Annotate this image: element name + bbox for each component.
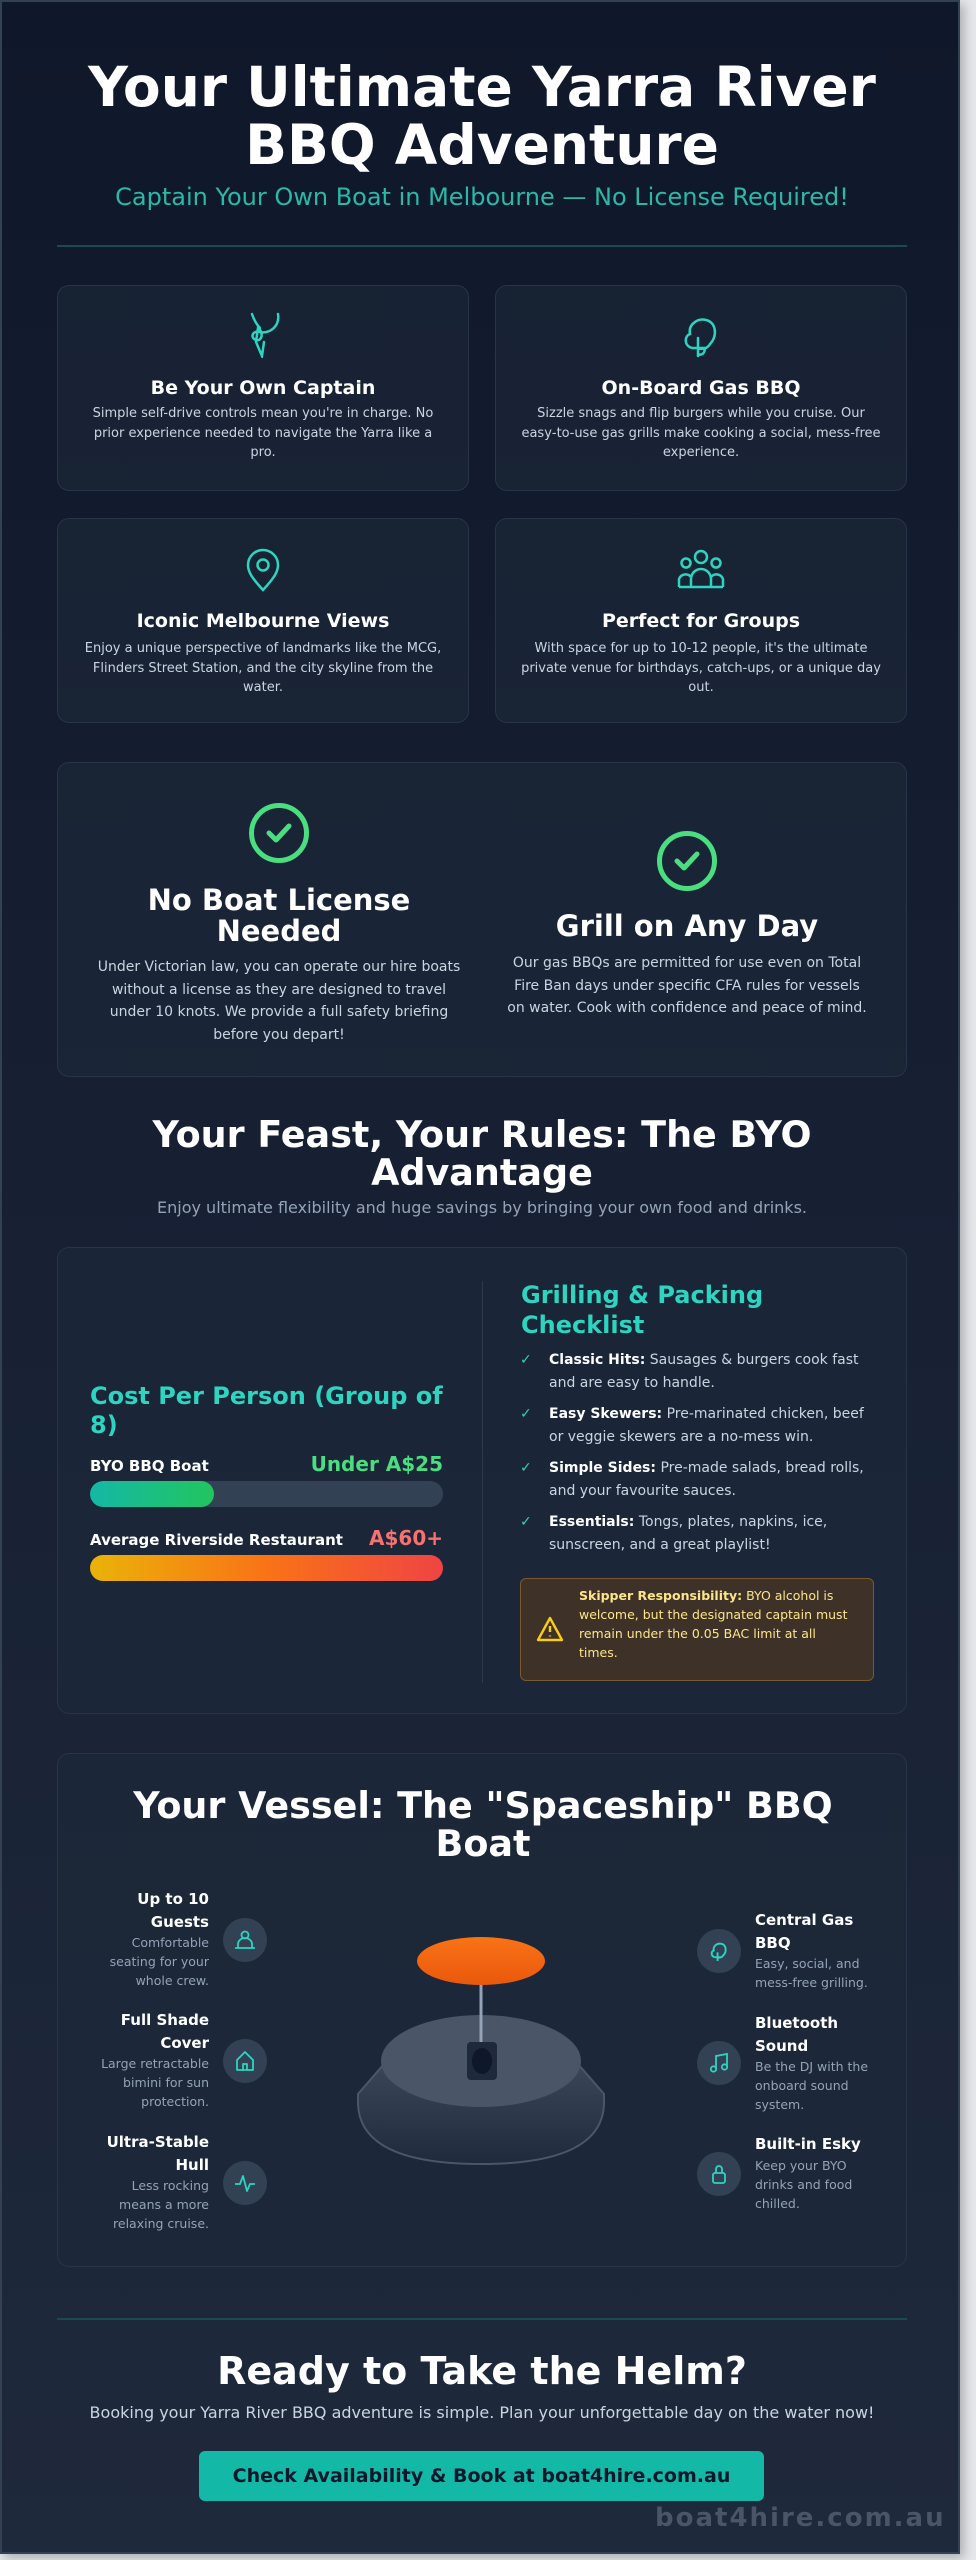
checklist heading: Grilling & Packing Checklist <box>521 1281 763 1339</box>
checklist items: ✓ <box>520 1406 532 1422</box>
panel: BYO <box>57 1247 907 1714</box>
icon: home <box>223 2039 267 2083</box>
card: Perfect for Groups <box>495 518 907 723</box>
text: no license <box>98 959 460 1042</box>
chart: cost per person: BYO BBQ Boat <box>90 1457 209 1475</box>
feature: esky <box>697 2135 861 2210</box>
feature: shade: Large retractable bimini for sun protection. <box>101 2056 209 2109</box>
checklist items <box>520 1352 864 1552</box>
card: Be Your Own Captain <box>57 285 469 491</box>
icon: bbq <box>684 318 716 358</box>
card: Iconic Melbourne Views: Iconic Melbourne Views <box>137 610 389 632</box>
checklist items: Easy Skewers: Pre-marinated chicken, beef or veggie skewers are a no-mess win. <box>549 1406 864 1444</box>
feature: shade: Full Shade Cover <box>121 2011 209 2052</box>
icon: group <box>678 550 724 588</box>
feature: sound: Be the DJ with the onboard sound system. <box>755 2059 868 2112</box>
text: grill any day <box>507 955 867 1016</box>
card: Perfect for Groups: Perfect for Groups <box>602 610 800 632</box>
feature: guests <box>110 1890 267 1988</box>
icon: person <box>223 1918 267 1962</box>
subtitle: Captain Your Own Boat in Melbourne — No License Required! <box>115 183 849 211</box>
card: On-Board Gas BBQ: Sizzle snags and flip burgers while you cruise. Our <box>537 406 865 421</box>
card: Be Your Own Captain: Be Your Own Captain <box>151 377 375 399</box>
feature: hull <box>107 2133 267 2231</box>
icon: bbq small <box>697 1929 741 1973</box>
footer heading: Ready to Take the Helm? <box>217 2349 747 2393</box>
card: Be Your Own Captain: Simple self-drive controls mean you're in charge. No prior experience needed to navigate the Yarra like a pro. <box>93 406 433 460</box>
callout: skipper responsibility <box>520 1578 874 1681</box>
text: no license: without a license as they are designed to travel <box>112 982 446 998</box>
card: On-Board Gas BBQ <box>495 285 907 491</box>
feature: sound: Bluetooth Sound <box>755 2014 838 2054</box>
title: Your Ultimate Yarra River BBQ Adventure <box>88 55 876 177</box>
icon: check right <box>657 831 717 891</box>
feature: shade <box>101 2011 267 2109</box>
icon: lock <box>697 2152 741 2196</box>
icon: map pin <box>246 548 280 592</box>
section heading: BYO: Your Feast, Your Rules: The BYO Advantage <box>152 1113 812 1194</box>
icon: pulse <box>223 2161 267 2205</box>
icon: warning <box>536 1616 564 1642</box>
text: no license: Under Victorian law, you can operate our hire boats <box>98 959 460 975</box>
panel: vessel <box>57 1753 907 2267</box>
section subtitle: Enjoy ultimate flexibility and huge savings by bringing your own food and drinks. <box>157 1198 807 1217</box>
checklist items: ✓ <box>520 1352 532 1368</box>
chart: cost per person <box>90 1382 443 1581</box>
feature: sound <box>697 2014 868 2112</box>
feature: esky: Built-in Esky <box>755 2135 861 2153</box>
checklist items: Essentials: Tongs, plates, napkins, ice, sunscreen, and a great playlist! <box>549 1514 827 1552</box>
text: grill any day: Our gas BBQs are permitted for use even on Total <box>513 955 861 971</box>
callout: skipper responsibility: remain under the 0.05 BAC limit at all <box>579 1626 816 1641</box>
checklist items: Simple Sides: Pre-made salads, bread rolls, and your favourite sauces. <box>549 1460 864 1498</box>
checklist items: ✓ <box>520 1460 532 1476</box>
panel: license & fire ban <box>57 762 907 1077</box>
feature: central bbq: Central Gas BBQ <box>755 1911 853 1952</box>
card: On-Board Gas BBQ: easy‑to‑use gas grills make cooking a social, mess‑free experience. <box>521 426 881 460</box>
icon: music <box>697 2041 741 2085</box>
icon: check left <box>249 803 309 863</box>
chart: cost per person: Under A$25 <box>311 1452 443 1476</box>
feature: guests: Comfortable seating for your whole crew. <box>110 1935 209 1988</box>
feature: central bbq: Easy, social, and mess-free grilling. <box>755 1956 868 1990</box>
callout: skipper responsibility: welcome, but the designated captain must <box>579 1607 847 1622</box>
icon: helm <box>250 312 280 358</box>
card: Iconic Melbourne Views: Enjoy a unique perspective of landmarks like the MCG, Flinders Street Station, and the city skyline from the water. <box>85 641 441 695</box>
callout: skipper responsibility: times. <box>579 1645 618 1660</box>
card: Perfect for Groups: With space for up to 10-12 people, it's the ultimate private venue for birthdays, catch-ups, or a unique day out. <box>521 641 881 695</box>
footer text: Booking your Yarra River BBQ adventure is simple. Plan your unforgettable day on the water now! <box>90 2403 874 2422</box>
checklist items: Classic Hits: Sausages & burgers cook fast and are easy to handle. <box>549 1352 859 1390</box>
heading: grill any day: Grill on Any Day <box>556 909 818 943</box>
chart: cost per person: Cost Per Person (Group of 8) <box>90 1382 443 1438</box>
checklist items: ✓ <box>520 1514 532 1530</box>
button: book: Check Availability & Book at boat4hire.com.au <box>233 2465 730 2487</box>
text: no license: before you depart! <box>213 1026 345 1042</box>
text: grill any day: on water. Cook with confidence and peace of mind. <box>507 1000 867 1016</box>
card: On-Board Gas BBQ: On-Board Gas BBQ <box>602 377 800 399</box>
watermark: boat4hire.com.au <box>655 2503 946 2533</box>
heading: no license: No Boat License Needed <box>148 883 410 948</box>
text: no license: under 10 knots. We provide a full safety briefing <box>110 1004 448 1020</box>
card: Iconic Melbourne Views <box>57 518 469 723</box>
feature: hull: Ultra-Stable Hull <box>107 2133 209 2174</box>
boat diagram <box>357 1937 605 2165</box>
feature: central bbq <box>697 1911 868 1990</box>
callout: skipper responsibility: Skipper Responsibility: BYO alcohol is <box>579 1588 833 1603</box>
chart: cost per person: Average Riverside Restaurant <box>90 1531 343 1549</box>
heading: vessel: Your Vessel: The "Spaceship" BBQ Boat <box>133 1784 833 1865</box>
chart: cost per person: A$60+ <box>369 1526 443 1550</box>
feature: esky: Keep your BYO drinks and food chilled. <box>755 2158 852 2210</box>
feature: guests: Up to 10 Guests <box>137 1890 209 1930</box>
feature: hull: Less rocking means a more relaxing cruise. <box>113 2178 209 2231</box>
button: book <box>199 2451 764 2501</box>
text: grill any day: Fire Ban days under specific CFA rules for vessels <box>514 978 860 994</box>
